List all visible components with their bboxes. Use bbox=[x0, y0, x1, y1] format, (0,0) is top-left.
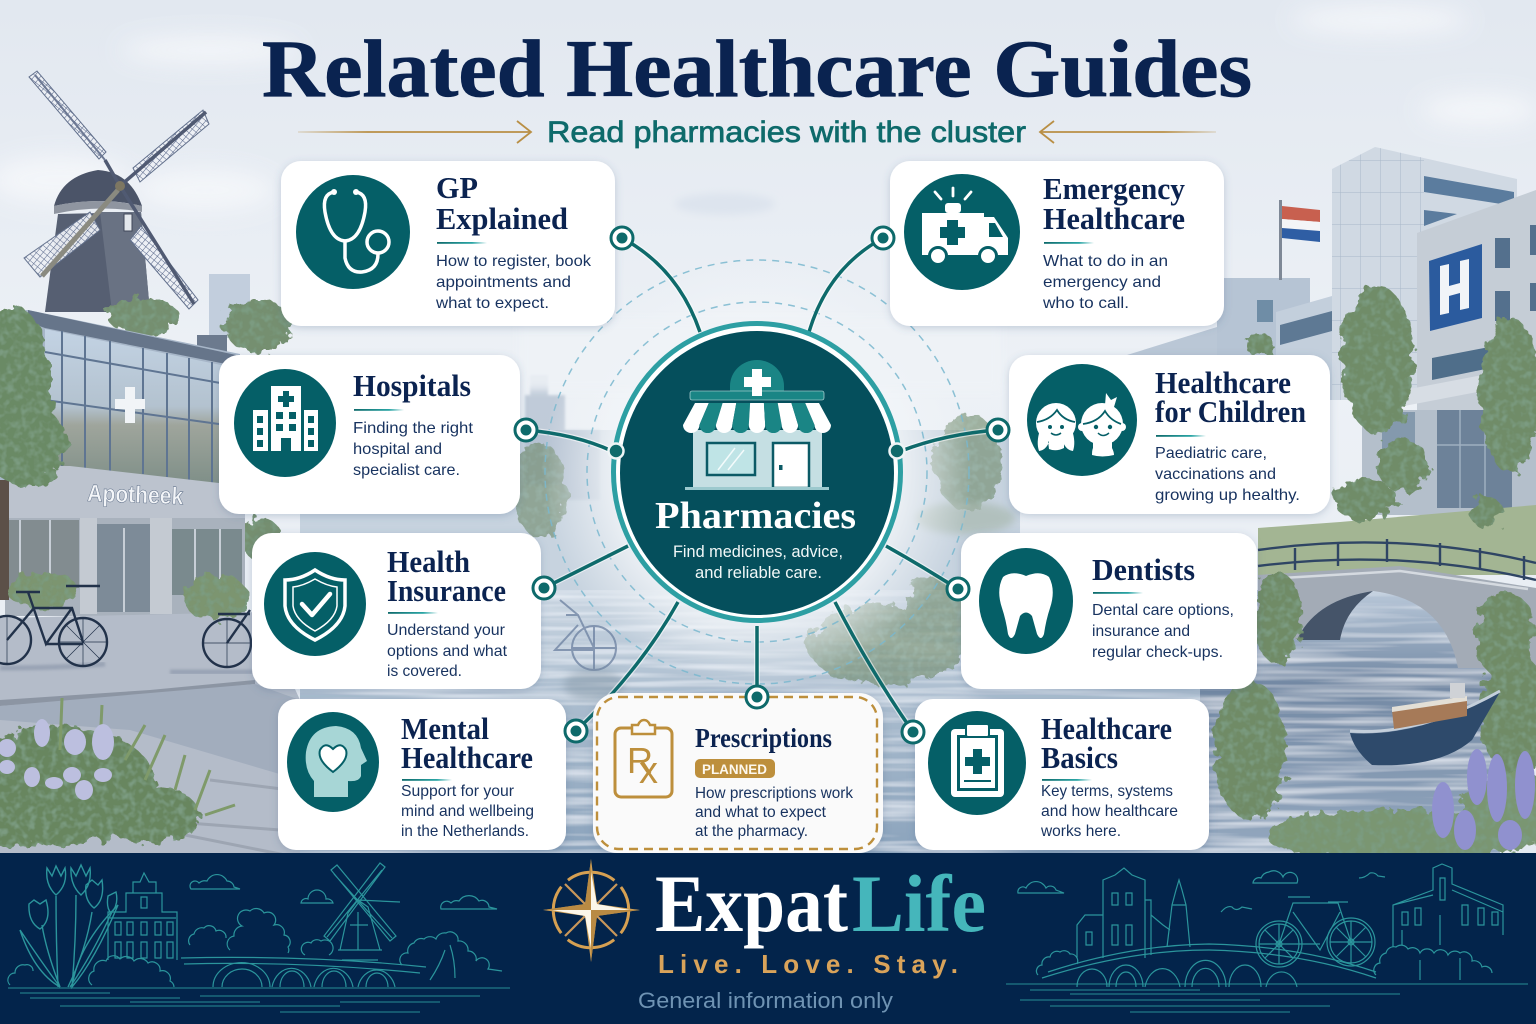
tulips bbox=[20, 865, 118, 987]
faded town silhouette bbox=[525, 375, 600, 500]
description: Finding the right bbox=[353, 420, 474, 437]
clouds and birds bbox=[1018, 871, 1385, 912]
card: Healthcare for Children bbox=[1009, 355, 1330, 514]
scene: arched stone bridge bbox=[1258, 539, 1536, 668]
node bbox=[746, 686, 768, 708]
scene: right bank greenery bbox=[1214, 572, 1536, 820]
badge: planned: PLANNED bbox=[702, 762, 767, 777]
icon: Rx clipboard bbox=[615, 720, 672, 797]
node bbox=[872, 227, 894, 249]
description: emergency and bbox=[1043, 274, 1161, 291]
hub description: and reliable care. bbox=[695, 564, 822, 582]
heading: Health bbox=[387, 544, 470, 579]
scene: grassy bank bbox=[1258, 505, 1536, 575]
card: Healthcare Basics bbox=[915, 699, 1209, 850]
canal houses bbox=[1077, 868, 1151, 958]
shrubs and bridge bbox=[8, 956, 174, 987]
card: Mental Healthcare bbox=[278, 699, 566, 850]
arrow: left gold bbox=[298, 121, 531, 143]
footer band bbox=[0, 853, 1536, 1024]
description: what to expect. bbox=[435, 295, 549, 312]
node bbox=[947, 578, 969, 600]
description: in the Netherlands. bbox=[401, 823, 529, 840]
card: Emergency Healthcare bbox=[890, 161, 1224, 326]
gabled house bbox=[108, 873, 177, 960]
trees bbox=[189, 909, 333, 955]
clouds bbox=[190, 875, 497, 909]
concentric dashed rings bbox=[545, 260, 969, 684]
logo: tagline: Live. Love. Stay. bbox=[658, 949, 958, 979]
description: at the pharmacy. bbox=[695, 823, 808, 840]
description: Paediatric care, bbox=[1155, 445, 1267, 462]
clouds bbox=[0, 6, 1536, 210]
scene: left trees behind the pharmacy bbox=[107, 298, 292, 562]
description: regular check-ups. bbox=[1092, 644, 1223, 661]
description: Understand your bbox=[387, 622, 506, 639]
icon: tooth bbox=[979, 548, 1073, 654]
heading: Dentists bbox=[1092, 552, 1195, 587]
description: works here. bbox=[1040, 823, 1121, 840]
description: growing up healthy. bbox=[1155, 487, 1300, 504]
description: hospital and bbox=[353, 441, 442, 458]
bicycle bbox=[1256, 921, 1302, 967]
connectors bbox=[525, 238, 998, 732]
node bbox=[902, 721, 924, 743]
boy bbox=[1078, 393, 1126, 456]
scene: distant tower bbox=[197, 274, 250, 355]
card: Dentists bbox=[961, 533, 1257, 689]
scene: right trees bbox=[1246, 286, 1536, 528]
central hub: Pharmacies bbox=[614, 324, 900, 620]
scene: lavender bbox=[1432, 749, 1535, 850]
arrow: right gold bbox=[1040, 121, 1216, 143]
heading: Mental bbox=[401, 711, 489, 746]
windmill bbox=[338, 900, 382, 960]
card: GP Explained bbox=[281, 161, 615, 326]
footer line art: left bbox=[8, 863, 510, 1012]
footer line art: right bbox=[1006, 864, 1528, 1012]
girl bbox=[1036, 403, 1076, 451]
hub heading: Pharmacies bbox=[655, 495, 856, 537]
description: How to register, book bbox=[436, 253, 592, 270]
description: Dental care options, bbox=[1092, 602, 1234, 619]
connector halos bbox=[525, 238, 998, 732]
hub anchor dots bbox=[608, 444, 904, 458]
heading: Healthcare bbox=[1155, 365, 1291, 400]
hub description: Find medicines, advice, bbox=[673, 543, 843, 561]
heading: Hospitals bbox=[353, 368, 471, 403]
icon: head with heart bbox=[287, 712, 379, 812]
heading: Emergency bbox=[1043, 171, 1185, 206]
scene: shrubs at pharmacy entrance bbox=[6, 572, 248, 622]
icon: Rx clipboard: R bbox=[627, 740, 653, 781]
card: Prescriptions (planned) bbox=[593, 693, 883, 853]
scene: hospital complex bbox=[1127, 147, 1536, 515]
scene: foreground reeds bbox=[1265, 772, 1536, 861]
card: Health Insurance bbox=[252, 533, 541, 689]
description: options and what bbox=[387, 643, 508, 660]
node bbox=[515, 419, 537, 441]
heading: Insurance bbox=[387, 573, 506, 608]
faded bicycle bbox=[555, 600, 616, 670]
water bbox=[8, 988, 510, 1012]
heading: Healthcare bbox=[401, 740, 533, 775]
description: and what to expect bbox=[695, 804, 827, 821]
heading: Healthcare bbox=[1041, 711, 1172, 746]
card: Hospitals bbox=[219, 355, 520, 514]
scene: left tree bbox=[0, 307, 66, 600]
description: Support for your bbox=[401, 783, 515, 800]
title: Related Healthcare Guides bbox=[262, 23, 1252, 114]
heading: GP bbox=[436, 170, 478, 205]
description: vaccinations and bbox=[1155, 466, 1276, 483]
heading: Basics bbox=[1041, 740, 1118, 775]
icon: Rx clipboard: x bbox=[639, 750, 658, 792]
scene: lower left plants bbox=[0, 698, 235, 847]
description: appointments and bbox=[436, 274, 571, 291]
icon: clipboard with cross bbox=[928, 711, 1026, 815]
description: who to call. bbox=[1042, 295, 1129, 312]
scene: boat bbox=[1350, 683, 1500, 765]
icon: stethoscope bbox=[296, 175, 410, 289]
heading: Prescriptions bbox=[695, 723, 832, 753]
description: insurance and bbox=[1092, 623, 1190, 640]
scene: Apotheek sign: Apotheek bbox=[87, 480, 184, 510]
icon: ambulance bbox=[904, 174, 1020, 290]
scene: right canal water bbox=[1200, 590, 1500, 855]
description: and how healthcare bbox=[1041, 803, 1178, 820]
heading: Explained bbox=[436, 201, 568, 236]
icon: hospital bbox=[234, 369, 336, 477]
bridge bbox=[1042, 944, 1376, 978]
description: is covered. bbox=[387, 663, 462, 680]
subtitle: Read pharmacies with the cluster bbox=[547, 116, 1026, 149]
heading: for Children bbox=[1155, 394, 1306, 429]
scene: bicycles bbox=[0, 586, 251, 667]
description: mind and wellbeing bbox=[401, 803, 534, 820]
small cloud behind the centre bbox=[675, 193, 775, 215]
description: What to do in an bbox=[1043, 253, 1168, 270]
hub icon: pharmacy storefront bbox=[683, 360, 831, 490]
logo: wordmark: Life bbox=[852, 858, 986, 949]
description: Key terms, systems bbox=[1041, 783, 1173, 800]
logo: wordmark: Expat bbox=[655, 858, 848, 949]
badge: planned bbox=[695, 759, 775, 778]
footer note: General information only bbox=[638, 988, 893, 1013]
water bbox=[1006, 984, 1528, 1012]
node bbox=[565, 720, 587, 742]
scene: windmill bbox=[24, 71, 209, 312]
logo: compass star bbox=[543, 859, 640, 962]
node bbox=[611, 227, 633, 249]
description: specialist care. bbox=[353, 462, 460, 479]
scene: pavement bbox=[0, 612, 300, 855]
node bbox=[533, 577, 555, 599]
scene: Apotheek pharmacy building bbox=[0, 310, 245, 616]
background scene: canal and hazy centre bbox=[300, 252, 1240, 855]
node bbox=[987, 419, 1009, 441]
heading: Healthcare bbox=[1043, 201, 1185, 236]
description: How prescriptions work bbox=[695, 785, 853, 802]
icon: shield bbox=[264, 552, 366, 656]
icon: children bbox=[1027, 364, 1137, 476]
right building bbox=[1393, 864, 1503, 947]
